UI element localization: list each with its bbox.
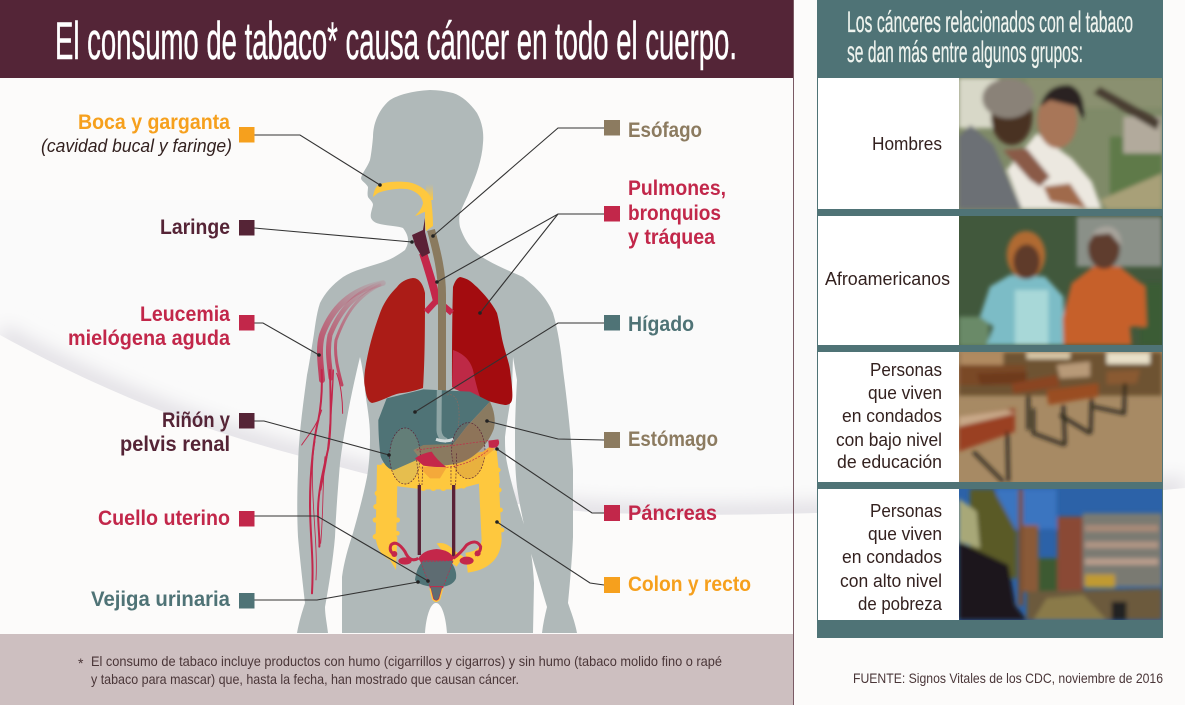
row: afroamericanos: Afroamericanos xyxy=(825,269,950,289)
label: boca y garganta xyxy=(41,111,254,156)
kidney: right xyxy=(452,423,485,479)
label: leucemia: mielógena aguda xyxy=(68,327,230,350)
label: pulmones xyxy=(604,177,726,249)
label: riñón: Riñón y xyxy=(162,409,230,432)
label: leucemia xyxy=(68,303,254,350)
row: afroamericanos xyxy=(818,216,1163,347)
abdomen details xyxy=(390,390,499,601)
trachea and bronchi xyxy=(423,253,452,313)
row: alto nivel de pobreza xyxy=(818,489,1162,620)
row: bajo nivel de educación: Personas xyxy=(870,360,942,380)
row: bajo nivel de educación xyxy=(818,352,1162,482)
row: alto nivel de pobreza: en condados xyxy=(842,547,942,567)
lungs xyxy=(364,277,512,405)
row: hombres xyxy=(818,78,1163,209)
title banner xyxy=(0,0,793,78)
panel: groups xyxy=(817,0,1163,638)
throat and mouth xyxy=(373,182,433,231)
row: bajo nivel de educación: de educación xyxy=(837,452,942,472)
label: laringe: Laringe xyxy=(160,216,230,239)
pancreas xyxy=(415,452,447,467)
label: cuello uterino: Cuello uterino xyxy=(98,507,230,530)
body silhouette xyxy=(297,90,577,633)
label: páncreas: Páncreas xyxy=(628,502,717,525)
row: bajo nivel de educación: en condados xyxy=(842,406,942,426)
photo: classroom xyxy=(959,352,1162,482)
footnote band xyxy=(0,634,793,705)
photo: apartment buildings xyxy=(959,489,1162,620)
row: bajo nivel de educación: con bajo nivel xyxy=(836,430,942,450)
page background xyxy=(0,320,1185,515)
label: boca y garganta: (cavidad bucal y faringe) xyxy=(41,136,232,156)
esophagus xyxy=(431,230,442,395)
label: boca y garganta: Boca y garganta xyxy=(78,111,230,134)
row: alto nivel de pobreza: que viven xyxy=(868,524,942,544)
panel heading xyxy=(847,6,1133,69)
label: riñón xyxy=(120,409,254,456)
row: alto nivel de pobreza: de pobreza xyxy=(858,594,943,614)
footnote band: El consumo de tabaco incluye productos con humo (cigarrillos y cigarros) y sin humo (tabaco molido fino o rapé xyxy=(91,653,722,669)
row: alto nivel de pobreza: Personas xyxy=(870,501,942,521)
label: pulmones: bronquios xyxy=(628,202,721,225)
stomach xyxy=(413,402,495,466)
footnote band: * xyxy=(78,655,84,671)
esophagus lower section xyxy=(439,390,447,441)
kidney: left xyxy=(390,428,420,484)
photo: couple xyxy=(959,216,1163,347)
colon xyxy=(373,450,504,570)
label: colon y recto: Colon y recto xyxy=(628,573,751,596)
label: esófago: Esófago xyxy=(628,119,702,142)
cervix xyxy=(421,561,453,588)
leader lines xyxy=(254,128,604,600)
ureters xyxy=(417,453,457,557)
label: esófago xyxy=(604,119,702,142)
row: bajo nivel de educación: que viven xyxy=(868,383,942,403)
stomach dashed outline xyxy=(447,395,459,427)
label: pulmones: Pulmones, xyxy=(628,177,726,200)
photo: two men talking xyxy=(959,78,1163,209)
larynx xyxy=(412,218,430,257)
label: vejiga urinaria: Vejiga urinaria xyxy=(91,588,230,611)
divider line between panels xyxy=(793,0,794,705)
liver xyxy=(378,389,490,470)
veins: acute myeloid leukemia strands xyxy=(302,283,383,593)
uterus and fallopian tubes xyxy=(390,542,481,567)
label: hígado: Hígado xyxy=(628,313,694,336)
label: estómago: Estómago xyxy=(628,428,718,451)
label: hígado xyxy=(604,313,694,336)
label: pulmones: y tráquea xyxy=(628,226,715,249)
footnote band: y tabaco para mascar) que, hasta la fecha, han mostrado que causan cáncer. xyxy=(91,671,519,687)
urinary bladder xyxy=(415,561,456,587)
label: leucemia: Leucemia xyxy=(140,303,230,326)
organs group xyxy=(302,182,512,601)
label: riñón: pelvis renal xyxy=(120,433,230,456)
row: hombres: Hombres xyxy=(872,134,942,154)
row: alto nivel de pobreza: con alto nivel xyxy=(840,571,942,591)
